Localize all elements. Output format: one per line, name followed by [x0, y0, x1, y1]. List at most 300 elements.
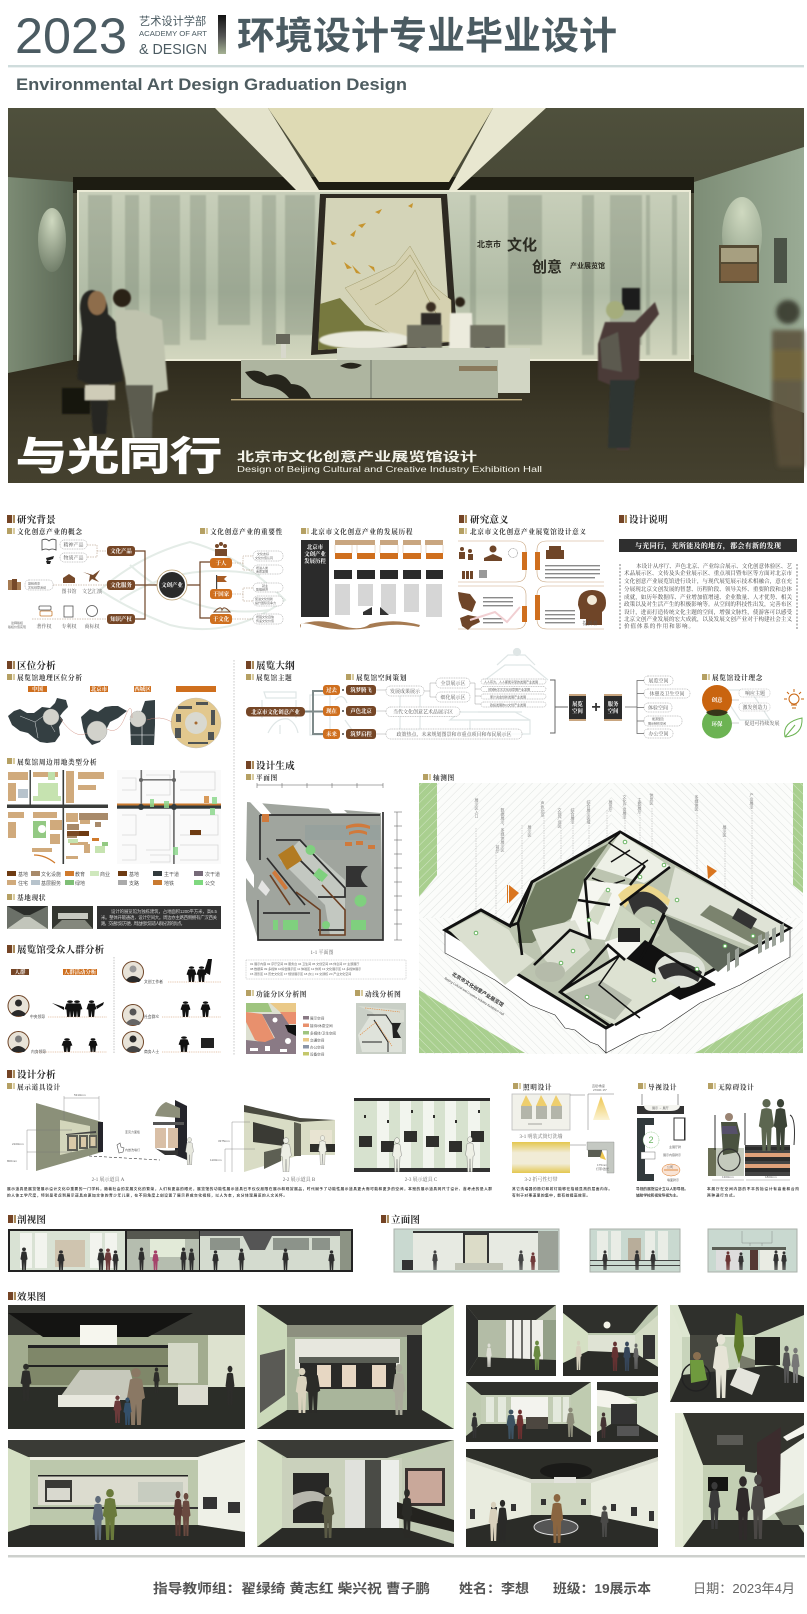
plan legend: 15 观影区 16 历史文化区 17 规划展示区 18 办公 19 交通核 20 产业文化空间 [250, 971, 351, 976]
service pills: 办公空间 [648, 730, 669, 738]
audience names: 社会群众 [144, 1014, 159, 1019]
sign top: 展示 → 展厅 [652, 1105, 669, 1110]
concept venn: 环保 [712, 720, 723, 728]
ip labels: 文艺汇演 [82, 588, 103, 595]
photographer [598, 288, 659, 450]
black title box: 北京市 [307, 543, 324, 551]
audience tags: 人群活动分析 [64, 968, 97, 976]
timeline columns [334, 545, 443, 617]
ip labels: 图书馆 [61, 588, 77, 595]
outlines [458, 541, 604, 629]
hero subtitle: 北京市文化创意产业展览馆设计 [237, 449, 478, 464]
header rule [8, 65, 804, 67]
sub theme pills: 筑梦启程 [350, 730, 372, 738]
pill labels: 助推经济 [256, 586, 268, 592]
prop B: 1100mm [210, 1158, 222, 1162]
black title box: 文创产业 [304, 550, 326, 558]
legends: 住宅 [18, 880, 28, 887]
prop description [7, 1186, 492, 1198]
leader labels: 前厅 [496, 844, 500, 853]
class: 班级：19展示本 [553, 1580, 651, 1596]
heading [381, 1214, 420, 1226]
space boxes: 空间 [572, 707, 583, 715]
plan sub heading [246, 773, 278, 782]
function legend: 多媒体/卫生空间 [310, 1030, 337, 1036]
lighting text [512, 1186, 612, 1198]
site status sub heading [7, 893, 46, 902]
location tags: 中国 [32, 685, 43, 693]
header [8, 8, 804, 94]
icons ip rights [39, 606, 98, 617]
heading [8, 1214, 46, 1226]
panel: lighting design [512, 1082, 614, 1198]
panel: elevation view [381, 1214, 797, 1272]
orange pills: 于文化 [213, 615, 230, 623]
render 8 [8, 1440, 245, 1547]
function legend: 设备空间 [310, 1052, 325, 1056]
hero subtitle: Design of Beijing Cultural and Creative Industry Exhibition Hall [237, 464, 542, 474]
floor [445, 832, 790, 1028]
heading: 无障碍设计 [718, 1082, 754, 1092]
exhibition zones: 细化展示区 [440, 694, 466, 701]
site text: 米。整体开敞通透，设计空间大。周边亦主路西侧拥有广汉西关 [101, 914, 218, 921]
panel: research significance [458, 514, 606, 630]
audience names: 商务人士 [144, 1049, 159, 1054]
panel: renders [8, 1291, 804, 1547]
lower rooms [562, 955, 679, 1025]
drawing caption: Beijing Cultural and Creative Industry Exhibition Hall [444, 976, 505, 1017]
entry room [449, 913, 535, 985]
strip detail [587, 1142, 614, 1173]
bulb outline [508, 548, 518, 558]
leader labels: 数据展示，多媒体展示区 [500, 807, 506, 852]
plan caption: 1-1 平面图 [311, 949, 333, 956]
plan legend: 08 数据库 09 多媒体 10综合展示区 11 体验区 12 休闲 13 文化展示区 14 多媒体展示 [250, 966, 361, 971]
wash diagram [512, 1094, 570, 1130]
leader labels: 展示区入口 [474, 797, 480, 819]
audience heading: 展览馆受众人群分析 [17, 944, 105, 956]
sub heading: 北京市文化创意产业展览馆设计意义 [470, 527, 587, 536]
axon sub heading [423, 773, 455, 782]
black title box [301, 540, 329, 617]
map land use [7, 770, 108, 864]
concept sub heading [7, 527, 83, 536]
function sub heading: 功能分区分析图 [256, 990, 307, 998]
right hall [664, 867, 788, 972]
slogan bar [619, 539, 797, 552]
importance sub heading [200, 527, 283, 536]
pill labels: 物质产品 [63, 554, 84, 562]
legends: 绿地 [75, 880, 85, 887]
render 10 [466, 1449, 658, 1547]
heading [7, 514, 56, 526]
meaning captions [483, 565, 600, 627]
footer credits [153, 1580, 795, 1596]
concept venn [702, 685, 732, 738]
accessibility text: 两种通行方式。 [707, 1192, 737, 1198]
dimensions A [27, 1096, 99, 1170]
guidance text [636, 1186, 688, 1198]
statement text: 分展现北京文创发展的智慧、历程阶段、领导关怀、重要阶段和总体 [624, 585, 792, 593]
floor plan [246, 802, 383, 940]
captions: 2-2 展示道具 B [283, 1176, 316, 1183]
leader labels: 展览厅 [608, 799, 614, 812]
sub heading [7, 1082, 61, 1092]
audience names: 文创工作者 [144, 979, 163, 984]
pill labels: 精神产品 [63, 542, 84, 548]
upper rooms [592, 833, 671, 885]
service pills: 体验空间 [648, 704, 668, 712]
pill labels: 提升国际竞争力 [255, 600, 276, 605]
central circle [157, 570, 187, 600]
prop A zoom: 亚克力面板 [125, 1129, 140, 1134]
date: 日期：2023年4月 [693, 1581, 795, 1596]
leader labels: 产业展示 [750, 792, 754, 809]
concept pills: 促进可持续发展 [744, 720, 780, 727]
wall sign: 文化 [507, 236, 537, 254]
location tags [28, 685, 216, 693]
theme root [246, 707, 305, 716]
legends: 基地 [129, 871, 139, 878]
exhibition zones: 政策热点、未来规划图景和市重点项目和布民展示区 [396, 731, 512, 738]
pill labels: 文化价值认同 [255, 555, 273, 560]
wall sign [477, 236, 605, 276]
panel: design statement [619, 514, 797, 630]
outer walls [445, 928, 790, 1053]
heading [8, 1291, 46, 1303]
legends: 主干道 [164, 871, 179, 878]
spot detail: 2700K 15° [593, 1088, 608, 1092]
ip labels: 专利权 [61, 623, 77, 630]
space sub heading [346, 673, 407, 682]
wheelchair user [718, 1113, 740, 1171]
mind map connectors [32, 545, 253, 619]
pill labels: 容纳阅览 [28, 580, 40, 586]
brown pill labels: 文化产品 [110, 547, 132, 555]
prop C [354, 1098, 490, 1172]
service pills [644, 676, 690, 738]
pale background buildings [262, 648, 770, 735]
stage headers [335, 540, 443, 545]
brown pill labels: 文化服务 [110, 581, 132, 589]
hero render [8, 108, 804, 483]
heading: 研究背景 [17, 514, 56, 526]
exhibition zones: 当代文化创意艺术品展示区 [393, 708, 453, 716]
walking visitors [759, 1099, 787, 1151]
icon: bulb [784, 689, 804, 708]
function legend [303, 1016, 337, 1056]
reception desk [231, 348, 530, 400]
background pattern [419, 783, 803, 1054]
caption 3-2: 3-2 折弓性灯带 [525, 1176, 557, 1183]
axon sub heading: 轴测图 [433, 773, 455, 782]
ip labels: 著作权 [36, 623, 52, 630]
panel: design generation [246, 760, 803, 1056]
period pills: 未来 [326, 730, 337, 738]
leader labels: 综合展示 [570, 807, 576, 824]
pill labels: 增强文化自信 [256, 614, 274, 619]
section visitors [20, 1247, 335, 1270]
strip diagram [512, 1142, 586, 1173]
orange pills: 于人 [216, 559, 227, 567]
visitors couple [62, 289, 168, 438]
flow sub heading: 动线分析图 [365, 990, 401, 998]
brown pill labels [110, 547, 132, 623]
central rooms [532, 880, 670, 982]
statement text: 本设计从序厅、声色北京、产业综合展示、文化创意体验区、艺 [636, 562, 792, 570]
sub heading: 北京市文化创意产业的发展历程 [311, 527, 413, 536]
service pills: 休憩及卫生空间 [649, 690, 685, 698]
exhibition zones: 领域新文艺文化创意展产业发展 [488, 686, 530, 692]
heading: 照明设计 [523, 1082, 552, 1092]
exhibition zones [376, 678, 546, 739]
render 7 [670, 1305, 804, 1402]
wall sign: 产业展览馆 [570, 261, 605, 270]
render 1 [8, 1305, 245, 1429]
audience tags [11, 968, 97, 976]
dimension labels A: 5310mm [74, 1093, 86, 1097]
leader labels: 主题展厅 [638, 797, 642, 814]
concept sub heading: 文化创意产业的概念 [17, 527, 83, 536]
heading [246, 760, 295, 772]
heading [246, 660, 295, 672]
legends: 次干道 [205, 871, 220, 878]
panel: guidance design [636, 1082, 688, 1198]
slogan bar: 与光同行，光所能及的地方，都会有新的发现 [635, 541, 781, 551]
concept icons [8, 539, 100, 590]
concept sub heading: 展览馆设计理念 [712, 673, 763, 682]
leader labels: 文创产业区 [558, 807, 562, 828]
caption 3-1: 3-1 明装式筒灯洗墙 [520, 1133, 562, 1140]
vertical section divider [233, 660, 235, 1055]
accessibility dimensions: 1300mm [722, 1175, 734, 1179]
space boxes: + [591, 699, 601, 716]
leader labels: 多媒体区 [694, 794, 700, 811]
prop B [210, 1105, 335, 1172]
location tags: 西城区 [134, 685, 151, 693]
leader labels: 声色北京 [540, 800, 546, 818]
dimension labels A: 2100mm [12, 1142, 24, 1146]
ceiling lights [215, 108, 546, 190]
concept pills: 激发创造力 [742, 704, 768, 711]
audience names [30, 979, 163, 1054]
sub heading [7, 673, 83, 682]
dimension labels A: 800mm [7, 1159, 18, 1163]
prop A zoom [89, 1100, 194, 1165]
pill labels: 传递文化价值 [256, 618, 274, 623]
concept pills [730, 689, 780, 727]
academy name: ACADEMY OF ART [139, 29, 207, 38]
wave [300, 621, 420, 630]
plan legend [246, 960, 406, 979]
exhibition zones: 累计资金创新发展产业发展 [490, 694, 526, 699]
sign wall [637, 1118, 686, 1181]
heading: 区位分析 [17, 660, 56, 672]
statement text: 术品展示区、文传及头企业展示区、重点项目暨布区等方面对北京市 [624, 569, 792, 577]
theme root: 北京市文化创意产业 [251, 708, 300, 716]
leader labels: 展示区 [528, 824, 532, 837]
legends: 基层服务 [41, 880, 61, 887]
legends: 基地 [18, 871, 28, 878]
panel: section view [8, 1214, 353, 1272]
windows [727, 923, 784, 972]
portraits [8, 962, 144, 1052]
panel: development timeline [300, 527, 443, 630]
meaning captions: 提新者 [582, 620, 598, 627]
sign samples: 展示内容牌示 [663, 1152, 681, 1157]
period pills [323, 685, 344, 739]
plan legend: 01 展示内容 02 序厅空间 03 服务台 04 卫生间 05 文创空间 06 休息间 07 主题展厅 [250, 961, 359, 966]
legends: 商业 [100, 871, 110, 878]
sub heading land use [7, 758, 97, 766]
back wall [78, 191, 690, 360]
year: 2023 [15, 8, 127, 64]
dimension labels A [7, 1093, 86, 1163]
statement text [620, 562, 797, 630]
statement text: 设计，进而打造传统文化主题的空间，增强文脉性，使游客可以感受 [624, 608, 792, 616]
map district [130, 700, 155, 745]
exhibition zones: 全景展示区 [440, 680, 466, 687]
brown pill labels: 知识产权 [110, 615, 132, 623]
reception staff and monitors [407, 297, 505, 353]
audience names: 内务领导 [31, 1049, 46, 1054]
sign samples: 墙面牌示 [667, 1177, 679, 1182]
exhibition zones: 发展成果展示 [390, 688, 421, 695]
sub theme pills [346, 685, 376, 739]
spot detail [570, 1083, 614, 1130]
captions: 2-3 展示道具 C [405, 1176, 438, 1183]
leader lines [476, 800, 752, 997]
orange pills: 于国家 [213, 590, 230, 598]
pill labels: 文化友好 [257, 551, 269, 556]
sub heading: 展览馆地理区位分析 [17, 673, 83, 682]
pill labels [28, 542, 276, 623]
site text: 设计的展览馆为独栋建筑，占地面积1200平方米，高6.5 [111, 908, 218, 915]
ramp and stairs [708, 1113, 794, 1176]
portrait busts [11, 966, 141, 1052]
accessibility dimensions: 1800mm [765, 1175, 777, 1179]
heading: 设计生成 [256, 760, 295, 772]
academy name [139, 14, 207, 58]
sign samples [641, 1132, 681, 1182]
sub heading: 展示道具设计 [17, 1082, 61, 1092]
elevation C [708, 1229, 797, 1272]
render 5 [466, 1382, 591, 1442]
captions: 2-1 展示道具 A [92, 1176, 125, 1183]
statement text: 成就，如历年数据库、产业增加值增速、企业数量、人才优势、相关 [624, 593, 792, 601]
accessibility text [707, 1186, 799, 1198]
spot detail: 直径/角度 [592, 1083, 605, 1088]
scale bar [257, 783, 402, 940]
connector [60, 708, 172, 735]
legends [7, 871, 220, 887]
blurred visitor [772, 300, 804, 467]
site photos [7, 906, 93, 929]
pill labels: 促进文化创新 [255, 596, 273, 601]
render 9 [257, 1440, 454, 1547]
render 3 [466, 1305, 556, 1376]
plan sub heading: 平面图 [256, 773, 278, 782]
function sub heading [246, 990, 307, 998]
ip labels: 版权价值实现 [8, 624, 26, 629]
heading: 剖视图 [17, 1214, 46, 1226]
period pills: 现在 [326, 707, 337, 715]
space boxes: 展览 [572, 700, 583, 708]
legends: 教育 [75, 871, 85, 878]
function legend: 接待/休息空间 [310, 1023, 333, 1028]
render 2 [257, 1305, 454, 1429]
leader labels: 文化产业展示 [622, 794, 628, 819]
pale background swirl [100, 542, 285, 629]
central circle: 文创产业 [161, 581, 183, 589]
sub theme pills: 声色北京 [350, 707, 372, 715]
heading: 导视设计 [648, 1082, 677, 1092]
sub theme pills: 筑梦腾飞 [350, 686, 372, 694]
teachers: 指导教师组：翟绿绮 黄志红 柴兴祝 曹子鹏 [153, 1580, 430, 1596]
wall sign: 创意 [532, 258, 562, 276]
service branch [625, 680, 644, 734]
legends: 文化设施 [41, 871, 61, 878]
exhibition zones: 政绩发展的以文创产业发展 [490, 702, 526, 707]
captions [92, 1176, 438, 1183]
panel: research background [7, 514, 285, 630]
map site circle [171, 698, 221, 748]
theme sub heading: 展览馆主题 [256, 673, 292, 682]
concept pills [25, 540, 283, 624]
leader labels: 展示区 [722, 824, 728, 837]
heading: 研究意义 [470, 514, 509, 526]
service pills: 能源型及 [652, 716, 664, 721]
prop B: 3375mm [218, 1139, 230, 1143]
site text [97, 906, 221, 929]
hero title: 与光同行 [16, 435, 222, 479]
strip detail: 灯带/透光 [596, 1166, 609, 1171]
elevation B [590, 1229, 680, 1272]
landscape painting [311, 194, 458, 355]
period pills: 过去 [326, 686, 337, 694]
leader labels: 休息区 [650, 792, 654, 805]
heading [619, 514, 668, 526]
ring markers [474, 840, 755, 999]
render 11 [675, 1413, 804, 1547]
audience names: 中央领导 [30, 1014, 45, 1019]
heading: 设计说明 [629, 514, 668, 526]
guidance text: 辅助学校和视觉导视为主。 [636, 1192, 680, 1198]
icons importance [214, 542, 230, 612]
black title box: 发展历程 [304, 557, 326, 565]
function legend: 展示空间 [310, 1016, 325, 1020]
right bracket [550, 680, 568, 733]
hero subtitle [237, 449, 542, 474]
site text: 路，交通比较方便，周边相比较适人群分流的优点。 [101, 920, 185, 927]
gradient bar [218, 15, 226, 54]
orange tags [522, 552, 540, 622]
sign samples: 公司 [667, 1164, 673, 1169]
function map [246, 1003, 296, 1054]
sign samples: 2 [648, 1135, 654, 1145]
section strip [8, 1229, 353, 1272]
audience divider [113, 957, 115, 1053]
statement text: 北京文创产业发展的宏大成就，以及发展文创产业对于构建社会主义 [624, 615, 792, 623]
location tags: 北京市 [91, 685, 108, 693]
heading [459, 514, 509, 526]
prop description: 的人体工学尺度，特别是考虑到展示道具应更加全体的青少年儿童，在不同角度上创设置了展示界成交化视频，以人为本，充分体现展览的人文关怀。 [7, 1192, 287, 1198]
student name: 姓名：李想 [459, 1580, 529, 1596]
concept sub heading [702, 673, 763, 682]
audience tags: 人群 [15, 968, 26, 976]
space boxes: 空间 [608, 707, 619, 715]
main title: 环境设计专业毕业设计 [237, 16, 617, 58]
